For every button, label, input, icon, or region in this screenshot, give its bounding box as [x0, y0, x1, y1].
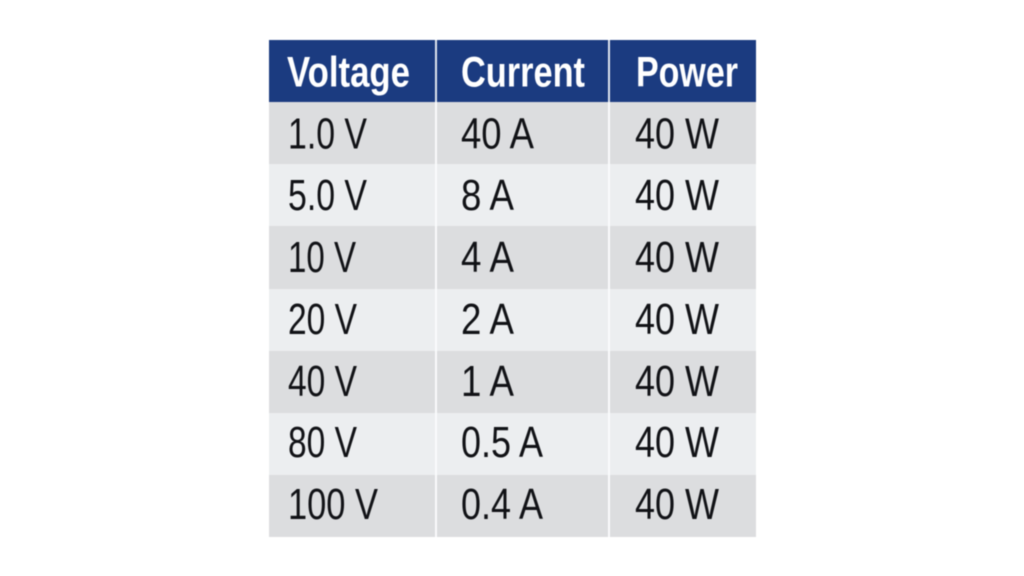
row: 1.0 V [269, 102, 756, 164]
row: 80 V [269, 413, 756, 475]
row: 5.0 V [269, 164, 756, 226]
row: 5.0 V: 40 W [635, 171, 719, 220]
row: 1.0 V: 40 A [461, 110, 535, 158]
row: 10 V [269, 226, 756, 289]
row: 100 V: 40 W [635, 480, 719, 529]
row: 40 V: 40 W [635, 357, 719, 406]
row: 20 V [269, 289, 756, 351]
row: 100 V [269, 475, 756, 537]
row: 10 V: 4 A [461, 233, 515, 282]
row: 80 V: 80 V [288, 418, 357, 467]
header row [269, 40, 756, 102]
row: 100 V: 100 V [288, 480, 379, 529]
row: 80 V: 0.5 A [461, 418, 544, 467]
row: 20 V: 2 A [461, 295, 515, 344]
row: 40 V: 1 A [461, 357, 515, 406]
row: 1.0 V: 40 W [635, 110, 719, 158]
table: voltage current power [269, 40, 756, 537]
row: 80 V: 40 W [635, 418, 719, 467]
row: 5.0 V: 8 A [461, 171, 515, 220]
row: 40 V: 40 V [288, 357, 357, 406]
row: 20 V: 40 W [635, 295, 719, 344]
row: 10 V: 40 W [635, 233, 719, 282]
row: 100 V: 0.4 A [461, 480, 544, 529]
header row: Power [636, 48, 738, 96]
header row: Current [461, 48, 585, 96]
row: 5.0 V: 5.0 V [288, 171, 367, 220]
row: 1.0 V: 1.0 V [288, 110, 367, 158]
header row: Voltage [287, 48, 410, 96]
row: 20 V: 20 V [288, 295, 357, 344]
row: 10 V: 10 V [288, 233, 356, 282]
row: 40 V [269, 351, 756, 413]
